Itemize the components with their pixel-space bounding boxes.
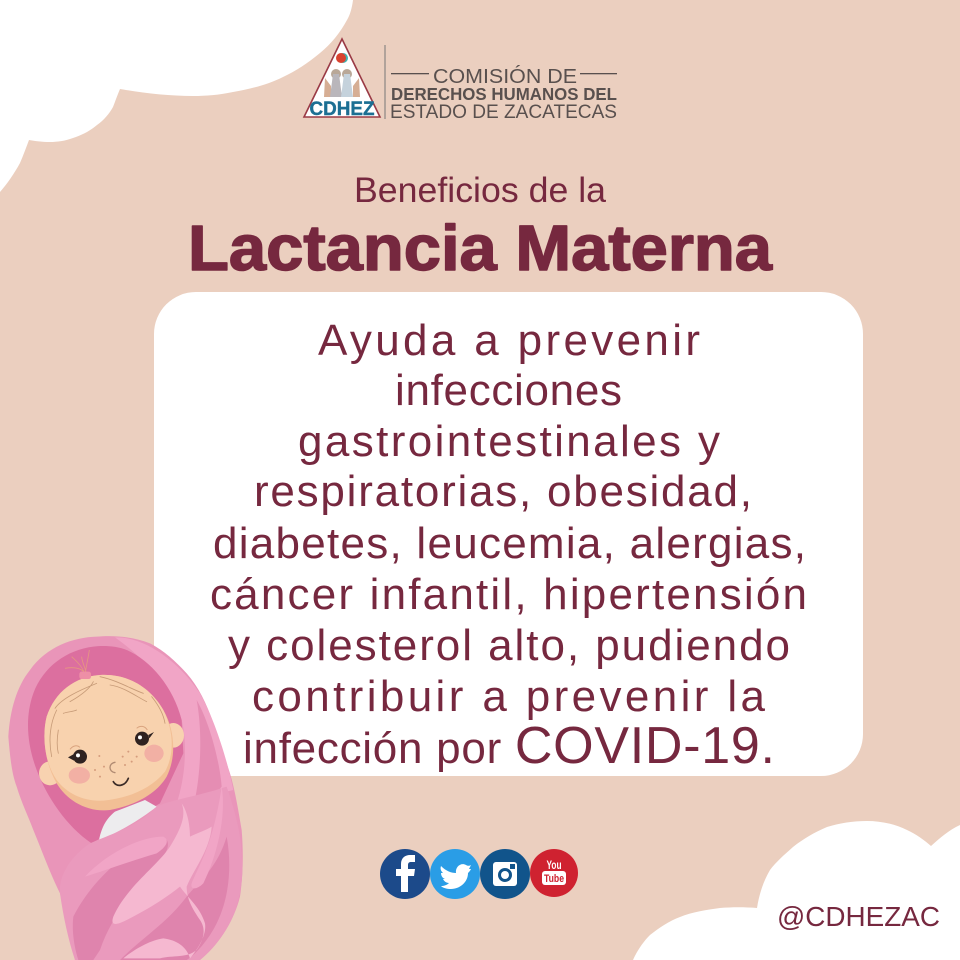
icon: youtube: Tube bbox=[544, 873, 564, 885]
benefits text: respiratorias, obesidad, bbox=[254, 467, 752, 516]
blanket shade folds bbox=[73, 838, 168, 960]
benefits text: y colesterol alto, pudiendo bbox=[228, 621, 790, 670]
hair bbox=[50, 677, 165, 757]
benefits text bbox=[210, 316, 807, 775]
blanket light band bbox=[115, 637, 233, 803]
cloud: bottom right bbox=[633, 821, 960, 960]
blanket front wrap bbox=[60, 787, 242, 960]
benefits text: infecciones bbox=[395, 366, 622, 415]
logo wordmark bbox=[390, 65, 617, 123]
logo: CDHEZ bbox=[304, 39, 617, 123]
panel: benefits card bbox=[154, 292, 863, 776]
illustration: swaddled baby bbox=[8, 636, 243, 960]
social icons bbox=[380, 849, 578, 899]
benefits text: gastrointestinales y bbox=[298, 417, 720, 466]
logo wordmark: DERECHOS HUMANOS DEL bbox=[391, 84, 617, 104]
icon: instagram bbox=[480, 849, 530, 899]
blanket dark sliver bbox=[193, 700, 222, 807]
cloud: top left bbox=[0, 0, 353, 192]
benefits text: infección por COVID-19. bbox=[243, 717, 775, 775]
icon: twitter bbox=[430, 849, 480, 899]
benefits text: contribuir a prevenir la bbox=[252, 672, 766, 721]
blanket light fold bbox=[112, 803, 212, 958]
freckles bbox=[94, 751, 138, 778]
icon: youtube bbox=[530, 849, 578, 897]
icon: youtube: You bbox=[546, 858, 562, 872]
logo divider bbox=[384, 45, 386, 119]
baby ears bbox=[39, 761, 61, 785]
logo wordmark: ESTADO DE ZACATECAS bbox=[390, 101, 617, 123]
benefits text: Ayuda a prevenir bbox=[318, 316, 700, 365]
subtitle: Beneficios de la bbox=[354, 171, 607, 210]
onesie bbox=[99, 800, 157, 840]
logo wordmark: COMISIÓN DE bbox=[433, 65, 577, 88]
social handle: @CDHEZAC bbox=[777, 901, 940, 932]
benefits text: diabetes, leucemia, alergias, bbox=[213, 519, 806, 568]
baby head bbox=[44, 675, 173, 810]
logo triangle emblem bbox=[304, 39, 380, 120]
title: Lactancia Materna bbox=[188, 212, 772, 284]
blanket back bbox=[8, 636, 243, 960]
nose and mouth bbox=[110, 762, 128, 785]
icon: facebook bbox=[380, 849, 430, 899]
cheeks bbox=[69, 767, 90, 784]
hood inner bbox=[28, 646, 183, 843]
baby face bbox=[44, 675, 172, 801]
benefits text: cáncer infantil, hipertensión bbox=[210, 570, 807, 619]
logo triangle emblem: CDHEZ bbox=[310, 99, 375, 120]
eyes bbox=[68, 726, 154, 764]
hair tuft bbox=[65, 650, 91, 679]
